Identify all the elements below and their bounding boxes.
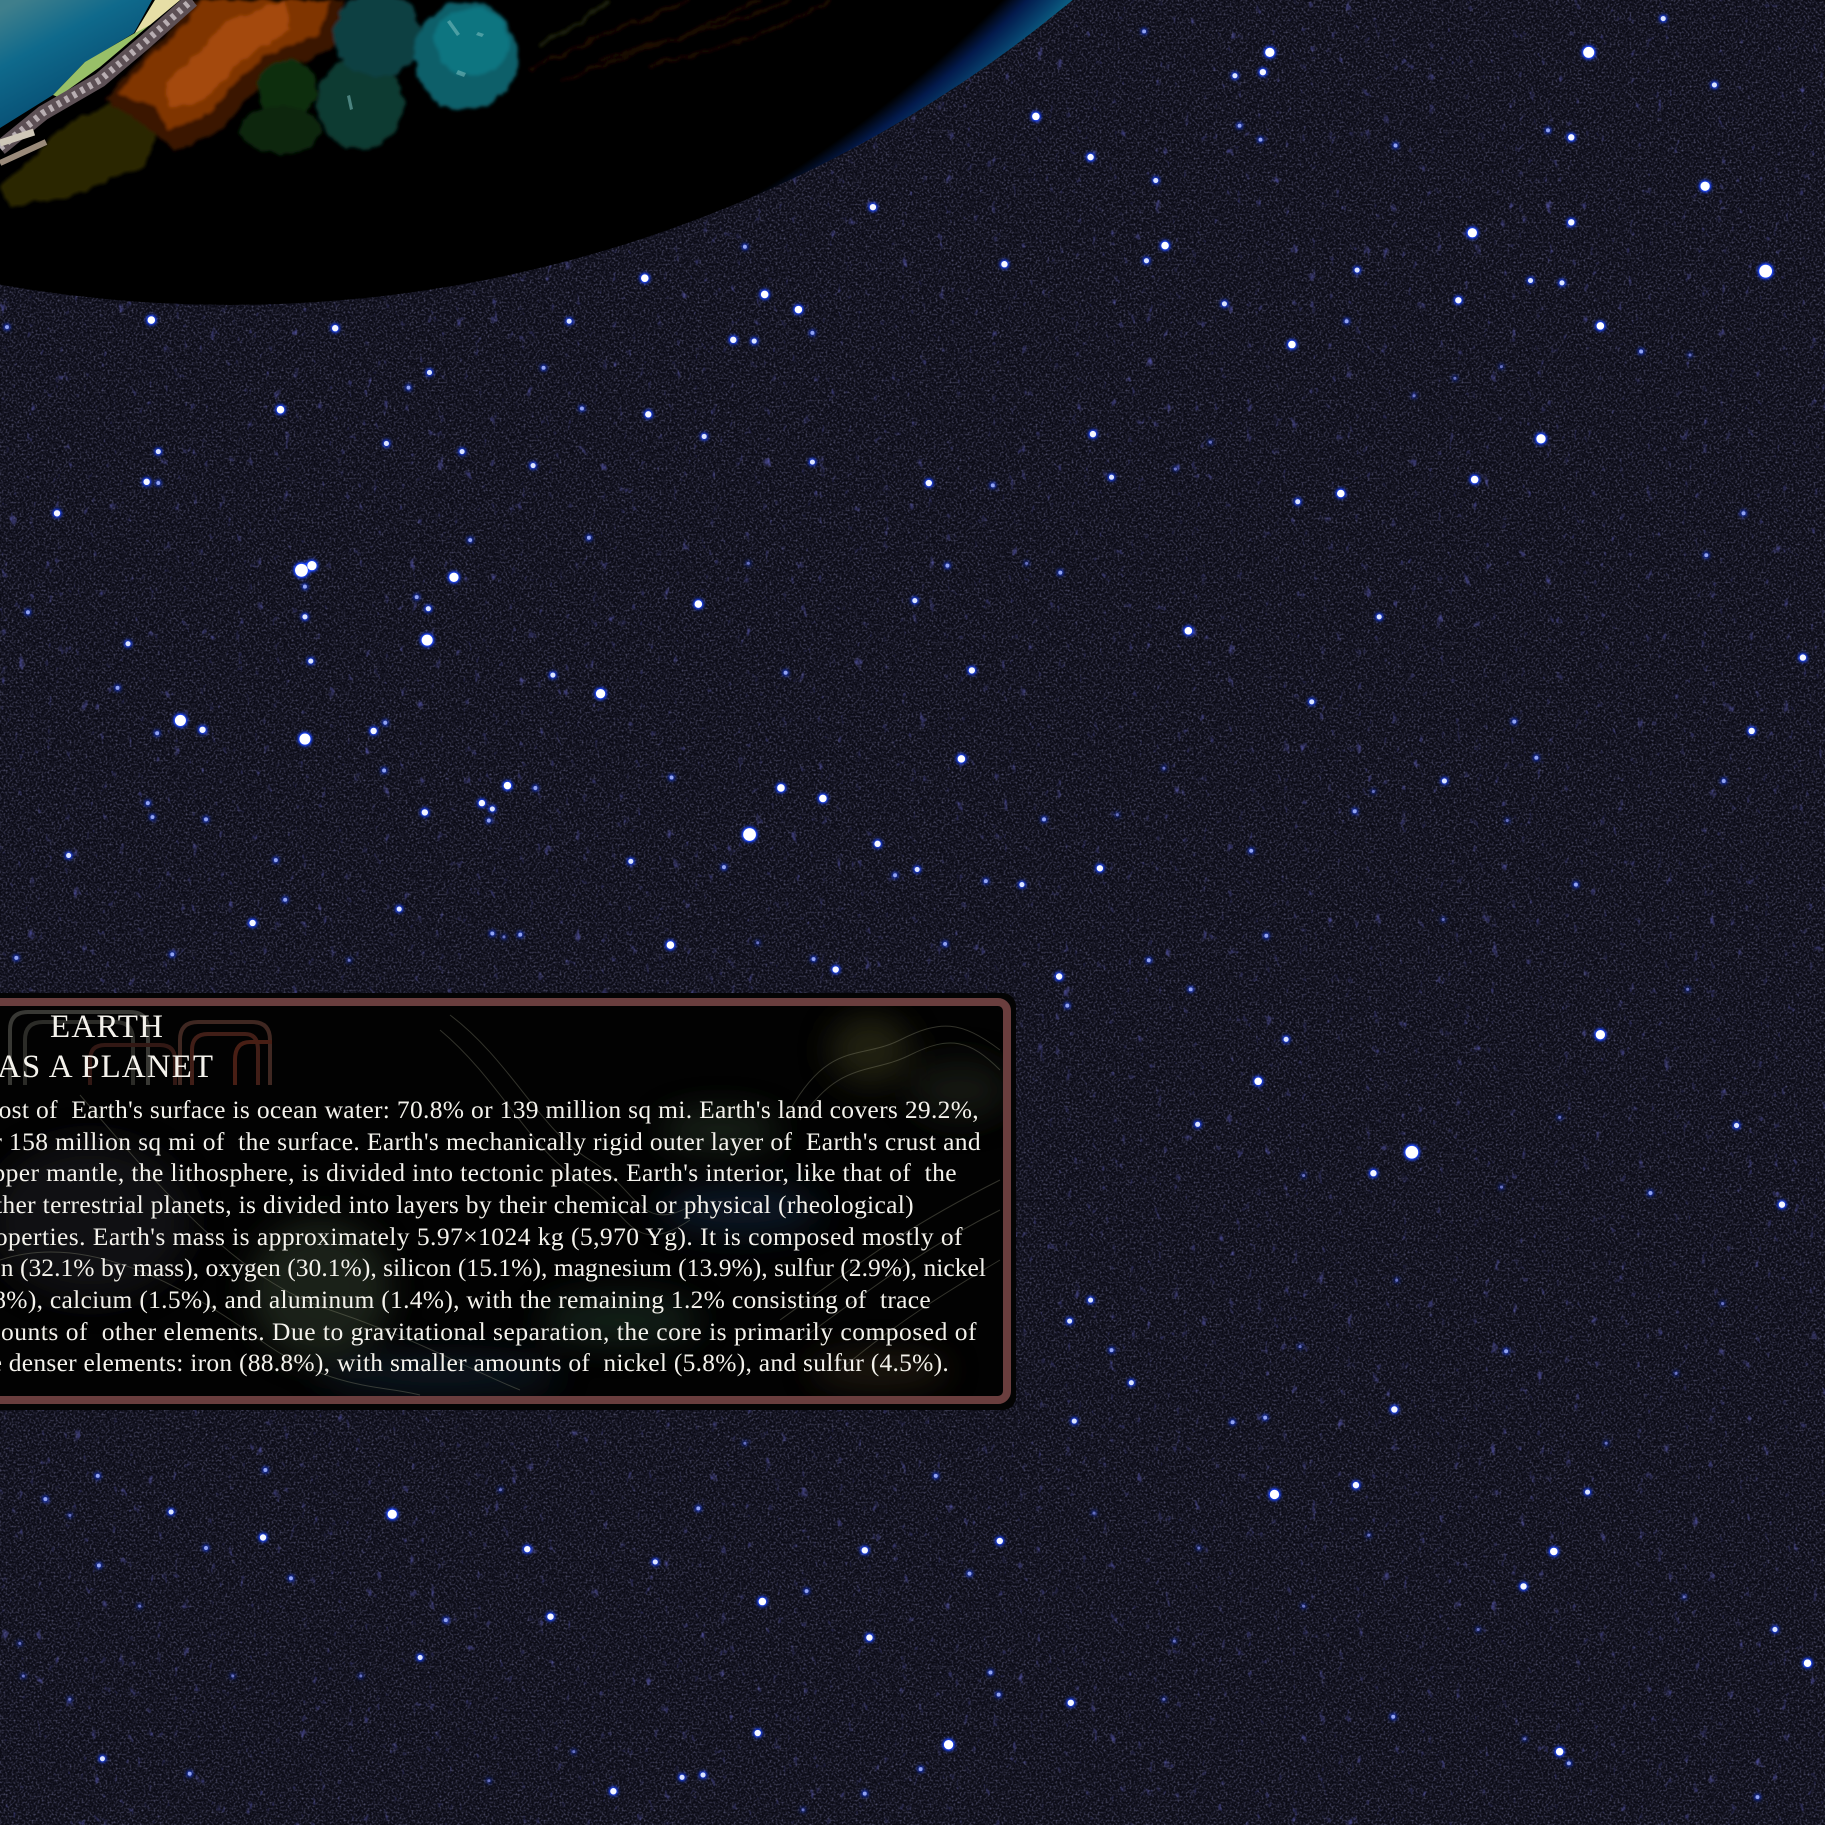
- dark green patches: [257, 60, 317, 120]
- panel title: AS A PLANET: [0, 1049, 213, 1085]
- dark red terrain streaks: [530, 0, 830, 80]
- panel body text: iron (32.1% by mass), oxygen (30.1%), silicon (15.1%), magnesium (13.9%), sulfur (2.9%), nickel: [0, 1253, 986, 1282]
- panel body text: Most of Earth's surface is ocean water: 70.8% or 139 million sq mi. Earth's land covers 29.2%,: [0, 1095, 979, 1124]
- ocean: [0, 0, 152, 128]
- panel body text: or 158 million sq mi of the surface. Earth's mechanically rigid outer layer of Earth's crust and: [0, 1127, 981, 1156]
- panel body text: upper mantle, the lithosphere, is divided into tectonic plates. Earth's interior, like that of the: [0, 1158, 957, 1187]
- striped corner motif: [10, 1012, 272, 1085]
- info panel: earth as a planet: [0, 993, 1016, 1410]
- panel texture: [0, 1012, 1010, 1395]
- orange highland: [118, 0, 330, 130]
- planet earth (cropped globe): [0, 0, 1072, 305]
- teal highland: [414, 2, 518, 110]
- panel title: EARTH: [50, 1009, 163, 1045]
- panel title: [0, 1009, 213, 1085]
- olive lowland: [0, 103, 157, 207]
- panel body text: [0, 1095, 986, 1377]
- panel frame: [0, 993, 1016, 1410]
- lime coastal strip: [53, 0, 180, 97]
- globe body and atmospheric rim: [0, 0, 1072, 305]
- teal highlights: [347, 20, 484, 110]
- panel body text: other terrestrial planets, is divided into layers by their chemical or physical (rheological): [0, 1190, 914, 1219]
- brown shadow under orange: [105, 0, 345, 150]
- mountain ridge: [0, 0, 192, 163]
- land masses: [0, 0, 830, 207]
- green-teal patches: [317, 57, 403, 149]
- panel body text: properties. Earth's mass is approximately 5.97×1024 kg (5,970 Yg). It is composed mostly of: [0, 1222, 963, 1251]
